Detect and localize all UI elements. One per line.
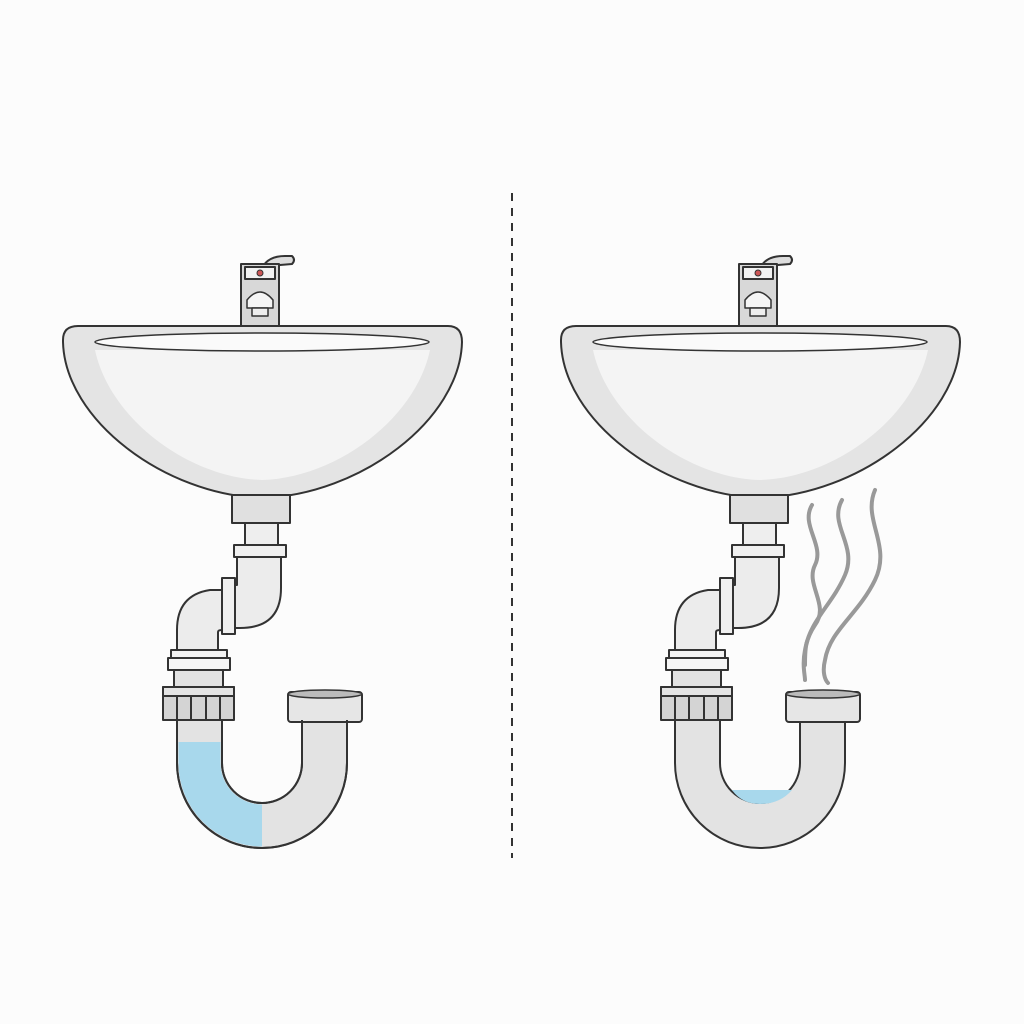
panel: left sink with full trap <box>63 256 462 848</box>
water in trap <box>178 742 262 846</box>
small water puddle <box>732 790 792 804</box>
divider dashed line <box>511 193 513 858</box>
panel: right sink with dry trap <box>561 256 960 848</box>
odor wavy lines <box>804 490 880 683</box>
